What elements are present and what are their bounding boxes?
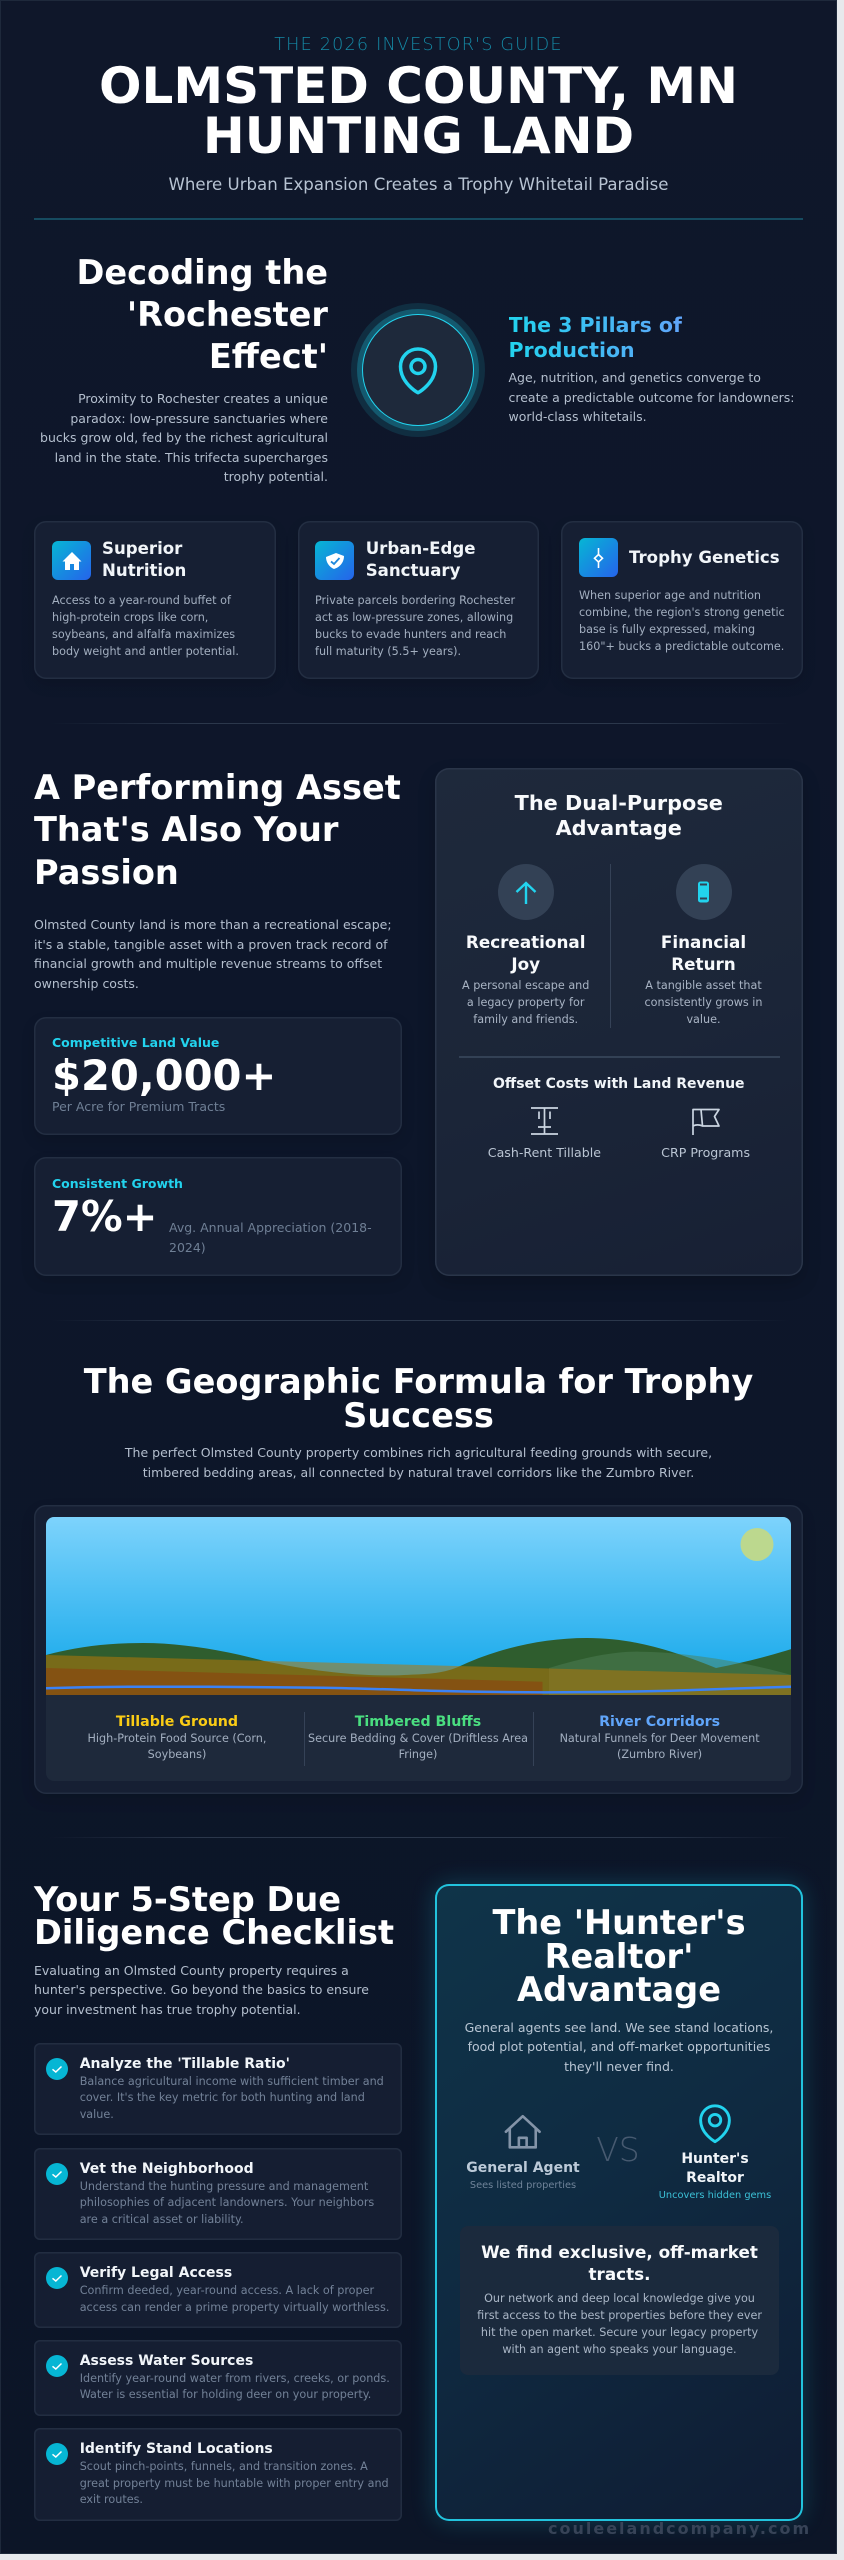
label title: Hunter's: [681, 2151, 749, 2167]
item title: Assess Water Sources: [80, 2353, 253, 2369]
block text: a legacy property for: [467, 996, 584, 1009]
card title: [102, 539, 186, 580]
stat label: Competitive Land Value: [52, 1035, 219, 1050]
item title: Analyze the 'Tillable Ratio': [80, 2056, 290, 2072]
card title: Sanctuary: [366, 561, 460, 580]
legend text: [560, 1732, 760, 1761]
text block: rochester paradox: land in the state. This trifecta supercharges: [55, 450, 328, 464]
heading: the 3 pillars of production: The 3 Pillars of: [508, 312, 682, 336]
panel: urban-edge sanctuary: [298, 521, 539, 679]
icon: check: [46, 2355, 68, 2377]
label: general agent: [435, 2159, 611, 2194]
block text: family and friends.: [473, 1013, 578, 1026]
legend text: Fringe): [399, 1748, 437, 1761]
stat label: Consistent Growth: [52, 1176, 183, 1191]
text block: pillars: Age, nutrition, and genetics converge to: [508, 370, 761, 385]
block text: A personal escape and: [462, 979, 589, 992]
panel heading: Advantage: [517, 1970, 721, 2009]
icon: shield check: [315, 541, 354, 580]
card text: full maturity (5.5+ years).: [315, 645, 461, 658]
card text: When superior age and nutrition: [579, 589, 761, 602]
block title: [661, 932, 746, 974]
panel heading: The Dual-Purpose: [515, 790, 723, 814]
icon: genetics: [579, 538, 618, 577]
block title: [466, 932, 585, 974]
heading: 5-step checklist: Diligence Checklist: [34, 1913, 394, 1952]
watermark: couleelandcompany.com: [548, 2519, 811, 2538]
title: OLMSTED COUNTY, MN: [99, 57, 738, 115]
stat note: [169, 1220, 372, 1255]
block text: [462, 979, 589, 1026]
stat note: Avg. Annual Appreciation (2018-: [169, 1220, 372, 1235]
heading: 5-step checklist: Your 5-Step Due: [34, 1880, 341, 1919]
item text: Water is essential for holding deer on your property.: [80, 2388, 371, 2401]
icon: check: [46, 2443, 68, 2465]
block: financial return: [645, 932, 762, 1026]
legend text: High-Protein Food Source (Corn,: [88, 1732, 266, 1745]
card text: 160"+ bucks a predictable outcome.: [579, 640, 784, 653]
heading: decoding the rochester effect: 'Rochester: [127, 295, 328, 334]
item title: Verify Legal Access: [80, 2265, 232, 2281]
item text: access can render a prime property virtually worthless.: [80, 2301, 389, 2314]
heading: the 3 pillars of production: Production: [508, 338, 635, 362]
heading: geographic formula: [84, 1362, 753, 1435]
title: [99, 57, 738, 165]
legend: timbered bluffs: [308, 1714, 528, 1761]
block title: Recreational: [466, 932, 585, 952]
card title: Urban-Edge: [366, 539, 475, 558]
panel heading: Advantage: [556, 816, 682, 840]
text block: checklist intro: hunter's perspective. Go beyond the basics to ensure: [34, 1982, 369, 1997]
panel intro text: food plot potential, and off-market opportunities: [468, 2039, 770, 2054]
item text: [80, 2459, 389, 2509]
heading: a performing asset: Passion: [34, 853, 179, 892]
legend title: River Corridors: [599, 1714, 720, 1730]
item text: Scout pinch-points, funnels, and transition zones. A: [80, 2460, 368, 2473]
label title: [625, 2150, 805, 2188]
item title: Identify Stand Locations: [80, 2441, 273, 2457]
icon: check: [46, 2163, 68, 2185]
panel intro text: General agents see land. We see stand locations,: [465, 2020, 773, 2034]
text block: checklist intro: Evaluating an Olmsted County property requires a: [34, 1962, 349, 1978]
callout text: first access to the best properties before they ever: [477, 2309, 762, 2322]
block text: A tangible asset that: [645, 979, 762, 992]
panel: superior nutrition: [34, 521, 276, 679]
text block: checklist intro: your investment has true trophy potential.: [34, 2002, 301, 2016]
callout heading: [460, 2241, 779, 2286]
vs marker: VS: [596, 2130, 640, 2169]
block text: value.: [686, 1013, 721, 1026]
card text: [52, 594, 239, 658]
landscape illustration: [46, 1517, 791, 1695]
heading: geographic formula: Success: [343, 1396, 494, 1435]
callout: off-market tracts: [460, 2226, 779, 2375]
panel: the dual-purpose advantage: [435, 768, 802, 1276]
card text: [579, 589, 785, 653]
text block: olmsted county land: Olmsted County land is more than a recreational escape;: [34, 917, 392, 932]
text block: pillars: [508, 370, 795, 424]
block text: consistently grows in: [645, 996, 762, 1009]
panel: trophy genetics: [561, 521, 802, 679]
stat value: $20,000+: [52, 1051, 276, 1100]
legend text: Soybeans): [148, 1748, 206, 1761]
card title: Superior: [102, 539, 182, 558]
stat card: competitive land value: [34, 1017, 402, 1135]
item text: are a critical asset or liability.: [80, 2213, 244, 2226]
card title: Trophy Genetics: [629, 548, 780, 566]
block: recreational joy: [462, 932, 589, 1026]
text block: olmsted county land: financial growth and multiple revenue streams to offset: [34, 956, 382, 971]
block title: Financial: [661, 932, 746, 952]
item text: [80, 2075, 384, 2121]
card text: body weight and antler potential.: [52, 645, 239, 658]
text block: rochester paradox: trophy potential.: [224, 469, 328, 484]
item title: Vet the Neighborhood: [80, 2161, 254, 2177]
item text: exit routes.: [80, 2493, 143, 2506]
panel heading: [435, 1906, 803, 2007]
label note: Sees listed properties: [470, 2180, 576, 2191]
legend text: Natural Funnels for Deer Movement: [560, 1732, 760, 1745]
text block: olmsted county land: [34, 917, 392, 990]
checklist item: stand locations: [34, 2428, 402, 2521]
text block: rochester paradox: paradox: low-pressure sanctuaries where: [70, 410, 328, 426]
panel heading: Realtor': [545, 1937, 693, 1976]
icon: check: [46, 2267, 68, 2289]
checklist item: water sources: [34, 2340, 402, 2416]
text block: pillars: world-class whitetails.: [508, 409, 647, 424]
checklist item: legal access: [34, 2252, 402, 2328]
subheading: offset costs: Offset Costs with Land Revenue: [493, 1076, 745, 1092]
heading: geographic formula: The Geographic Formula for Trophy: [84, 1362, 753, 1401]
icon: cash-rent tillable: [531, 1107, 558, 1135]
panel intro text: they'll never find.: [564, 2058, 674, 2074]
legend text: (Zumbro River): [617, 1748, 702, 1761]
block text: [645, 979, 762, 1026]
card text: bucks to evade hunters and reach: [315, 628, 506, 641]
icon: home: [52, 541, 91, 580]
block title: Joy: [511, 954, 540, 974]
card text: combine, the region's strong genetic: [579, 606, 785, 619]
eyebrow: the 2026 investor's guide: THE 2026 INVESTOR'S GUIDE: [274, 35, 563, 55]
legend text: [308, 1732, 528, 1761]
item text: Confirm deeded, year-round access. A lack of proper: [80, 2284, 374, 2297]
card text: soybeans, and alfalfa maximizes: [52, 628, 235, 641]
subtitle: Where Urban Expansion Creates a Trophy Whitetail Paradise: [168, 175, 669, 194]
item text: Understand the hunting pressure and management: [80, 2180, 368, 2193]
icon: device: [676, 864, 732, 920]
item text: Identify year-round water from rivers, creeks, or ponds.: [80, 2372, 390, 2385]
legend: river corridors: [560, 1714, 760, 1761]
item text: cover. It's the key metric for both hunting and land: [80, 2091, 365, 2104]
text block: checklist intro: [34, 1962, 369, 2016]
panel intro text: [435, 2018, 803, 2076]
callout text: with an agent who speaks your language.: [502, 2343, 737, 2356]
text block: olmsted county land: ownership costs.: [34, 976, 139, 990]
heading: a performing asset: [34, 768, 401, 892]
checklist item: neighborhood: [34, 2148, 402, 2240]
heading: decoding the rochester effect: [76, 253, 328, 376]
icon: pin: [692, 2100, 738, 2146]
block title: Return: [671, 954, 736, 974]
heading: the 3 pillars of production: [508, 312, 682, 362]
item text: [80, 2372, 390, 2401]
heading: decoding the rochester effect: Effect': [209, 337, 328, 376]
heading: a performing asset: A Performing Asset: [34, 768, 401, 807]
legend title: Timbered Bluffs: [355, 1714, 481, 1730]
card text: Access to a year-round buffet of: [52, 594, 231, 607]
label note: Uncovers hidden gems: [659, 2190, 771, 2201]
stat value: 7%+: [52, 1192, 157, 1241]
text block: rochester paradox: [40, 391, 328, 484]
callout text: hit the open market. Secure your legacy property: [481, 2326, 758, 2339]
label: crp programs: CRP Programs: [661, 1145, 750, 1160]
text block: geographic intro: [124, 1445, 712, 1480]
callout text: Our network and deep local knowledge give you: [484, 2292, 755, 2305]
icon: check: [46, 2058, 68, 2080]
icon: crp flag: [692, 1108, 720, 1135]
item text: great property must be huntable with proper entry and: [80, 2477, 389, 2490]
label: hunter's realtor: [625, 2150, 805, 2204]
label title: Realtor: [686, 2170, 744, 2186]
text block: pillars: create a predictable outcome for landowners:: [508, 390, 795, 404]
panel heading: [514, 790, 723, 840]
card text: [315, 594, 516, 658]
legend text: [88, 1732, 266, 1761]
card text: Private parcels bordering Rochester: [315, 594, 515, 607]
legend: tillable ground: [88, 1714, 266, 1761]
icon: house: [502, 2111, 544, 2152]
title: HUNTING LAND: [203, 107, 634, 165]
item text: Balance agricultural income with sufficient timber and: [80, 2075, 384, 2088]
heading: a performing asset: That's Also Your: [34, 810, 338, 849]
callout heading: tracts.: [589, 2264, 650, 2284]
legend text: Secure Bedding & Cover (Driftless Area: [308, 1732, 528, 1745]
text block: rochester paradox: bucks grow old, fed by the richest agricultural: [40, 430, 328, 445]
text block: olmsted county land: it's a stable, tangible asset with a proven track record of: [34, 936, 388, 952]
item text: philosophies of adjacent landowners. Your neighbors: [80, 2196, 374, 2209]
callout text: [460, 2291, 779, 2358]
item text: [80, 2284, 389, 2314]
icon: glowing location pin: [362, 314, 474, 426]
stat note: 2024): [169, 1240, 206, 1255]
label: cash-rent tillable: Cash-Rent Tillable: [488, 1145, 601, 1160]
heading: 5-step checklist: [34, 1880, 394, 1952]
card text: high-protein crops like corn,: [52, 611, 208, 624]
label title: General Agent: [466, 2160, 580, 2176]
item text: value.: [80, 2108, 114, 2121]
item text: [80, 2180, 374, 2226]
callout heading: We find exclusive, off-market: [481, 2242, 758, 2262]
text block: geographic intro: timbered bedding areas, all connected by natural travel corridors like the Zumbro River.: [143, 1464, 694, 1480]
checklist item: tillable ratio: [34, 2042, 402, 2135]
panel: landscape diagram: [34, 1505, 802, 1794]
text block: rochester paradox: Proximity to Rochester creates a unique: [78, 391, 328, 406]
card title: Nutrition: [102, 561, 186, 580]
stat note: Per Acre for Premium Tracts: [52, 1099, 225, 1114]
card text: act as low-pressure zones, allowing: [315, 611, 513, 624]
card text: base is fully expressed, making: [579, 623, 755, 636]
panel: hunter's realtor advantage: [435, 1884, 803, 2521]
text block: geographic intro: The perfect Olmsted County property combines rich agricultural feeding grounds with secure,: [125, 1445, 712, 1460]
stat card: consistent growth: [34, 1157, 402, 1276]
panel heading: The 'Hunter's: [492, 1903, 746, 1942]
legend title: Tillable Ground: [116, 1714, 238, 1730]
card title: [366, 539, 475, 580]
icon: up arrow: [498, 864, 554, 920]
heading: decoding the rochester effect: Decoding the: [76, 253, 328, 292]
